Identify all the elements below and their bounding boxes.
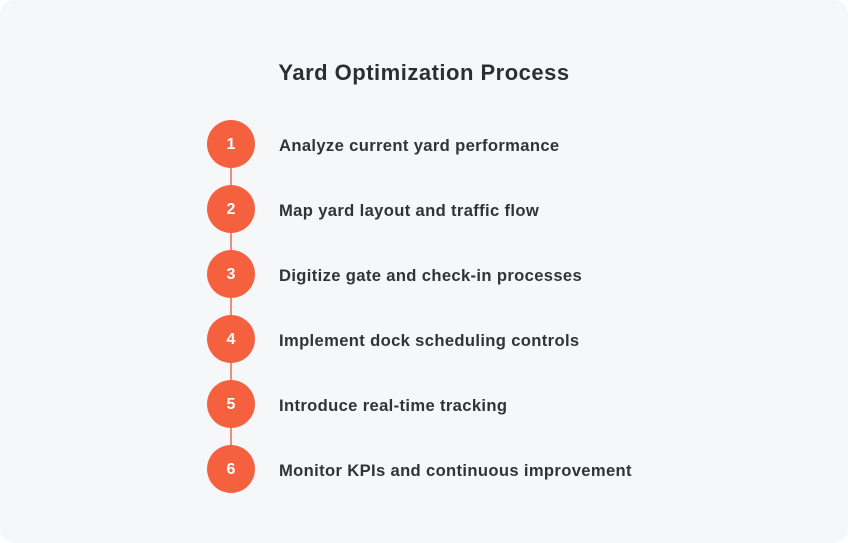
step 5: Introduce real-time tracking: [279, 396, 507, 415]
step 4: [207, 315, 580, 363]
step 2: [207, 185, 539, 233]
step 1: [207, 120, 559, 168]
step 3: 3: [227, 266, 235, 283]
step 1: Analyze current yard performance: [279, 136, 559, 155]
step 2: Map yard layout and traffic flow: [279, 201, 539, 220]
step 3: Digitize gate and check-in processes: [279, 266, 582, 285]
step 1: 1: [227, 136, 235, 153]
step 6: 6: [227, 461, 235, 478]
step 3: [207, 250, 582, 298]
step 4: 4: [227, 331, 235, 348]
step 5: [207, 380, 507, 428]
step 4: Implement dock scheduling controls: [279, 331, 580, 350]
step 6: [207, 445, 632, 493]
step 6: Monitor KPIs and continuous improvement: [279, 461, 632, 480]
step 5: 5: [227, 396, 235, 413]
title: Yard Optimization Process: [278, 60, 570, 85]
connector line: [230, 150, 232, 470]
step 2: 2: [227, 201, 235, 218]
